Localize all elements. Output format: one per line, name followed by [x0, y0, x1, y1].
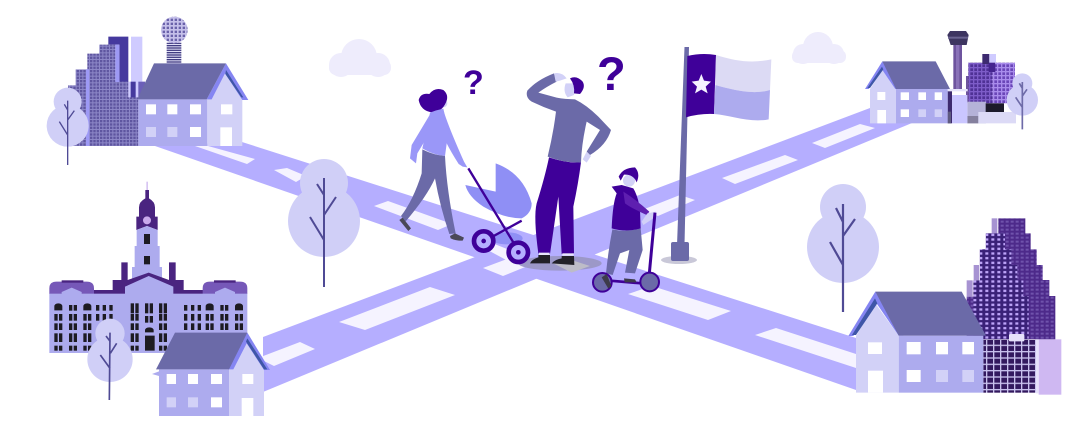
- question mark: woman: ?: [463, 64, 484, 102]
- light tower: [131, 37, 142, 82]
- main body: [49, 276, 247, 353]
- question mark: man: ?: [597, 47, 626, 100]
- cloud: left: [329, 39, 391, 77]
- wing domes: [49, 282, 247, 294]
- road markings: [195, 124, 875, 368]
- flag cloth: [686, 54, 771, 120]
- courthouse spire and dome: [136, 182, 158, 230]
- back stepped face: [967, 218, 1055, 339]
- courthouse: [49, 182, 247, 353]
- skyline: upper-right Tower of the Americas: [947, 31, 1016, 123]
- Reunion Tower: [161, 17, 188, 64]
- skyline: upper-left with Reunion Tower: [68, 17, 188, 146]
- office block: [968, 63, 1015, 103]
- tree: upper-left: [47, 88, 89, 165]
- flag: Texas: [661, 47, 771, 264]
- man shadow: [518, 256, 602, 273]
- tree: centre-left: [288, 159, 360, 287]
- tower highlight: [86, 45, 119, 146]
- man: [527, 73, 611, 265]
- woman: [399, 89, 467, 241]
- tree: centre-right: [807, 184, 879, 312]
- stepped grid tower: [68, 45, 138, 146]
- flag base shadow: [661, 256, 697, 264]
- stroller: [465, 163, 532, 262]
- rooftop block: [982, 54, 996, 72]
- road: upper-left to lower-right: [155, 142, 856, 390]
- podium cap: [1009, 334, 1024, 341]
- tree: courthouse front: [87, 319, 133, 400]
- lit front face: [973, 233, 1029, 339]
- windows: [54, 303, 243, 351]
- boy on scooter: [593, 167, 659, 292]
- flag pole: [671, 47, 689, 261]
- cloud: right: [792, 32, 846, 64]
- podium block: [983, 340, 1036, 393]
- house: lower-right: [848, 292, 986, 393]
- tree: upper-right: [1007, 73, 1038, 129]
- tower windows: [144, 234, 150, 264]
- road: lower-left to upper-right: [263, 108, 912, 392]
- dark tower: [108, 37, 128, 82]
- low blocks: [967, 102, 1016, 123]
- observation tower: [947, 31, 969, 90]
- front box: [948, 89, 968, 123]
- courthouse tower: [132, 226, 162, 282]
- roof silhouette: [94, 262, 203, 294]
- grey edge columns: [967, 218, 997, 297]
- side block: [1039, 339, 1061, 395]
- house: upper-right: [865, 61, 950, 123]
- skyline: lower-right Austin tower: [967, 218, 1061, 395]
- people group: [399, 73, 659, 292]
- house: upper-left: [137, 63, 248, 146]
- low striped tower: [128, 82, 145, 98]
- house: lower-left: [152, 333, 270, 416]
